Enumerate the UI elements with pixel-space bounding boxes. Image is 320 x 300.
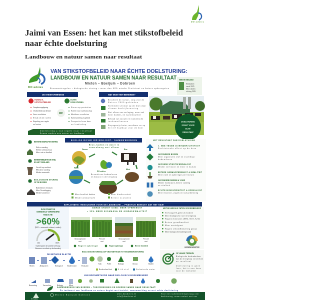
panel: resultaat van doelsturing: HET RESULTAAT VAN DOELSTURING <box>153 139 196 142</box>
poster logo <box>28 67 45 89</box>
panel: nieuw beleid: NIEUW BELEID <box>179 80 194 82</box>
field legend <box>74 238 149 248</box>
kringloop checks: Meer kwaliteit bodem <box>75 193 96 196</box>
panel: left column practices: OP DE BODEM <box>34 182 47 184</box>
panel: target: Doelsturing is geen <box>176 264 200 268</box>
panel: practice list: Hogere stikstofbenutting gewas <box>165 228 197 230</box>
panel: wat moet het bereiken: WAT MOET HET BEREIKEN? <box>108 93 136 96</box>
list: huidig beleid: Geen resultaten <box>33 113 46 116</box>
logo top right: DO advies <box>191 22 205 24</box>
icon: green check: DOELSTURING <box>70 102 84 104</box>
panel: resultaat van doelsturing: 1. NEE TEGEN 30 MINDER UITSTOOT <box>158 146 201 148</box>
kringloop diagram: Bevorderen bodemleven <box>91 173 117 176</box>
panel: target: voor de toekomst <box>176 270 197 272</box>
panel: resultaat van doelsturing: Meer organische stof en vruchtbaar <box>158 156 195 158</box>
footer <box>25 292 205 300</box>
panel: wat moet het bereiken: Niet alleen een verlaging, maar ook <box>108 111 144 114</box>
poster heading: LANDBOUW EN NATUUR SAMEN NAAR RESULTAAT <box>50 76 177 82</box>
footer: Mieten Boeijum Dobroen <box>55 294 90 297</box>
list: huidig beleid: Stapeling van regels <box>33 120 49 123</box>
panel: resultaat van doelsturing: Meer insecten, vogels en natuurbeleving <box>158 192 198 194</box>
photo: field 3 <box>115 217 133 237</box>
field legend: Perceel <box>99 238 105 240</box>
logo top right <box>191 5 205 24</box>
panel: practice list: Meer biologische bodemgezond <box>165 230 191 234</box>
panel: nieuw beleid: richting 2035 <box>186 90 196 93</box>
panel: nieuw beleid: vanaf 2025 <box>186 86 194 88</box>
panel: field comparison <box>71 206 156 248</box>
panel: wat moet het bereiken: het erf haalbaar voor de boer <box>108 126 143 129</box>
icon: green check: ECHTE <box>70 100 77 102</box>
photo: field 1 <box>71 217 90 237</box>
footer: Voor een samenwerkingsvraag over <box>161 292 199 296</box>
method steps 1: Kalk <box>98 264 102 266</box>
panel: resultaat van doelsturing: GEZONDERE BODEM <box>158 154 178 156</box>
closing text: De toekomst van landbouw en natuur begint met inzicht, samenwerking en met echte doelsturing <box>60 289 178 292</box>
panel: left column practices: BETERE BEDRIJFSVOERING <box>34 142 59 144</box>
panel: gauge: (N2O + ammoniak uitstoot, minder) <box>35 226 62 229</box>
method steps 2 <box>29 274 177 287</box>
icon: green check <box>64 98 84 104</box>
method steps 2: Verwerking <box>43 284 51 287</box>
icon: colour wheel: BODEM-MONITOR <box>185 247 200 249</box>
panel: wat moet het bereiken: Natura 2000-gebieden <box>108 101 138 104</box>
callout: green circle: ZORGT VOOR <box>182 125 195 127</box>
panel: de stikstofimpasse <box>27 92 92 126</box>
panel: target: OP LANGE TERMIJN <box>176 252 194 255</box>
panel: field comparison: + 35% MEER BIOMASSA EN GEWASKWALITEIT <box>87 210 148 213</box>
icon: red warning: UITSTOOTBELEID <box>34 102 52 104</box>
panel: practice list: Meer biologische rust in kringloop <box>165 214 196 218</box>
gauge chart <box>37 230 59 241</box>
panel: kringloop heading <box>65 138 142 149</box>
kringloop diagram: en balans in de kringloop <box>91 176 117 178</box>
method steps 2: Effect <box>69 284 74 287</box>
section bar: EXPLOITATIE: RESULTATEN VOOR DE LANDBOUW — PRAKTIJK BEWIJST DAT HET KAN! <box>64 203 164 206</box>
icon: result items <box>146 144 154 197</box>
method steps 1: Gewas <box>132 264 138 266</box>
photo: field 4 <box>136 217 156 237</box>
panel: wat moet het bereiken: Stapsgewijs beter, meetbaar en op <box>108 124 145 127</box>
field legend: Gewasopname <box>74 238 86 240</box>
field legend: met <box>145 240 148 243</box>
green banner <box>28 129 95 135</box>
method steps 1: DE METHODE IN ACTIE <box>47 253 72 256</box>
section bar <box>27 202 202 206</box>
panel: left column practices: Meer rust en kwaliteit <box>36 151 52 154</box>
method steps 1: Bodemwater <box>67 264 77 268</box>
field legend: met <box>101 240 104 243</box>
kringloop diagram: Mest <box>126 168 130 171</box>
kringloop diagram: Water <box>74 166 79 170</box>
list: doelsturing: Perspectief voor boer <box>71 120 91 123</box>
list: doelsturing <box>68 106 92 126</box>
photo: cows on pasture <box>149 96 205 140</box>
method steps 1: Verbeterde water <box>136 268 155 271</box>
panel: practice list: Meer wortelgroei <box>165 224 184 227</box>
callout: green circle: RESULTAAT <box>182 131 194 134</box>
panel: practice list <box>160 207 204 249</box>
panel: kringloop heading: BIOLOGISCHE KRINGLOOP: SAMENWERKEN <box>71 139 138 142</box>
panel: resultaat van doelsturing: GEZONDE STIKSTOFKRINGLOOP <box>158 164 192 166</box>
panel: kringloop heading: samenhang met elkaar <box>89 146 119 149</box>
poster heading <box>50 67 188 90</box>
panel: gauge: >60% <box>55 242 60 244</box>
panel: wat moet het bereiken <box>99 92 148 129</box>
kringloop diagram: Koe <box>124 149 127 151</box>
panel: wat moet het bereiken: slimme bedrijfsvoering <box>108 107 138 110</box>
panel: target: Biologische bodembeheer <box>176 255 201 258</box>
panel: resultaat van doelsturing: Minder verliezen en meer in balans <box>158 166 196 168</box>
panel: target: kan de kringloop versterken <box>176 258 203 260</box>
kringloop checks: Betere economie <box>111 196 131 199</box>
panel: left column practices: BEHEERSBAAR IN DE STAL <box>34 158 57 162</box>
method steps 1 <box>29 250 155 271</box>
panel: left column practices: Meer N-vastlegging <box>36 189 51 192</box>
callout: green circle: DOELSTURING <box>181 122 195 124</box>
kringloop diagram <box>69 149 139 194</box>
method steps 1: Biologisch <box>55 266 63 268</box>
panel: de stikstofimpasse: DE STIKSTOFIMPASSE <box>42 93 65 96</box>
poster logo: DO advies <box>28 85 43 89</box>
field legend: Betere kwaliteit <box>135 245 148 248</box>
panel: resultaat van doelsturing: Meer eiwit en opbrengst per hectare <box>158 174 194 176</box>
list: doelsturing: Samenwerking in gebied <box>71 116 90 120</box>
method steps 2: VAN BRONMETHODE NAAR BIOLOGISCH BODEMBEHEER <box>84 274 149 277</box>
panel: left column practices: Minder ammoniak <box>36 171 50 174</box>
panel: gauge <box>28 207 69 250</box>
field legend: Hogere opbrengst <box>109 245 123 248</box>
panel: resultaat van doelsturing: Minder medicijnen, betere voeding <box>158 182 190 184</box>
kringloop checks: Minder uitstoot lucht <box>75 196 96 199</box>
list: doelsturing: Meetbare resultaten <box>71 113 89 116</box>
icon: green leaf <box>47 286 53 291</box>
list: huidig beleid: Strijd om de ruimte <box>33 116 51 120</box>
panel: kringloop heading: Bron, bodem en water in <box>89 144 119 146</box>
panel: practice list: Betere grondkwaliteit <box>165 221 190 224</box>
panel: resultaat van doelsturing: bodemleven <box>158 159 172 161</box>
panel: left column practices: Slimme uitstoot-maat <box>36 148 52 152</box>
panel: gauge: 100 <box>37 242 40 244</box>
panel: target: en resultaat <box>176 260 192 263</box>
green banner: Doelsturing = van regels naar resultaat <box>40 130 93 133</box>
method steps 1: Evaluatie <box>82 264 89 268</box>
panel: resultaat van doelsturing <box>146 139 206 201</box>
panel: target: luxe, het is een kans <box>176 267 201 270</box>
method steps 1: Bodem <box>148 264 154 266</box>
footer: www.doadvies.nl <box>117 294 137 296</box>
list: huidig beleid: Complexe regelgeving <box>33 106 48 109</box>
panel: target <box>160 250 204 274</box>
panel: left column practices: Bodemleven in balans <box>36 188 53 190</box>
kringloop diagram: Gewas <box>82 149 88 151</box>
field legend: Perceel <box>143 238 149 240</box>
panel: practice list: Hogere mineralen (NH4, NO3, K2O) <box>165 218 200 220</box>
panel: practice list: Verhoogd N-gebruik bodem <box>165 212 194 214</box>
footer: info@doadvies.nl <box>117 296 137 298</box>
panel: left column practices: BIOLOGISCHE STURING <box>34 180 59 182</box>
field legend: met <box>123 240 126 243</box>
panel: left column practices: EN HET WEILAND <box>34 161 50 164</box>
poster heading: Bronmaatregelen • biologische sturing • meer dan 60% minder N-uitstoot en betere opbrengsten <box>50 87 169 90</box>
method steps 1: Biologie <box>118 264 124 266</box>
panel: resultaat van doelsturing: ECHTE BIODIVERSITEIT & KRINGLOOP <box>158 190 203 192</box>
icon: OF circle: OF <box>59 111 63 115</box>
article title: Jaimi van Essen: het kan met stikstofbeleid <box>25 28 184 38</box>
panel: resultaat van doelsturing: GEZONDERE DIEREN & VOER <box>158 180 186 182</box>
panel: wat moet het bereiken: Behoud van sociale en economische <box>108 118 143 120</box>
method steps 1: Analyseren <box>40 264 48 268</box>
callout: green circle <box>175 114 201 140</box>
method steps 1: BIOLOGISCHE KRINGLOOP VAN METHODE TOT BODEMMONITORING <box>82 250 145 254</box>
article title: naar échte doelsturing <box>25 39 107 48</box>
list: doelsturing: Sturen op prestaties <box>71 106 91 109</box>
panel: nieuw beleid: Meer doelen <box>186 88 195 90</box>
panel: left column practices: Stal en voeding <box>36 146 48 149</box>
icon: red warning: HUIDIG N- <box>34 100 44 102</box>
method steps 2: Bemesting <box>29 284 37 287</box>
panel: resultaat van doelsturing: Rechtstreeks effect op de bron <box>158 147 196 150</box>
kringloop diagram: DO advies <box>97 171 106 173</box>
panel: gauge: Bewezen resultaat op de boerderij <box>35 247 61 250</box>
panel: wat moet het bereiken: Bescherm de natuur, zorg voor de <box>108 98 144 102</box>
closing text: SAMENWERKEN VAN BOEREN – THEORIEKENNIS EN BOEREN SAMEN NAAR RESULTAAT! <box>57 286 156 289</box>
list: huidig beleid <box>30 106 51 126</box>
panel: gauge: GEMIDDELD VERMINDERD <box>36 212 60 214</box>
panel: field comparison: GEWAS GROEIT GOED: MEER OPBRENGST <box>92 206 143 210</box>
field legend: Gewasopname <box>118 238 130 240</box>
panel: left column practices <box>27 140 59 195</box>
panel: wat moet het bereiken: toekomstkansen <box>108 120 128 123</box>
panel: left column practices: Minder kunstmest <box>36 192 50 194</box>
list: huidig beleid: Onzekerheid voor de boer <box>33 110 51 112</box>
list: huidig beleid: en kosten <box>33 123 41 126</box>
poster heading: VAN STIKSTOFBELEID NAAR ÉCHTE DOELSTURING: <box>50 67 188 75</box>
panel: left column practices: Gericht op resultaat <box>36 166 51 169</box>
kringloop checks: Meer biodiversiteit <box>111 193 132 196</box>
panel: gauge: Opbrengsten & kwaliteit omhoog <box>36 244 60 248</box>
panel: resultaat van doelsturing: en vitaliteit <box>158 184 171 187</box>
method steps 1: Meten <box>30 264 34 268</box>
article title <box>25 28 184 48</box>
panel: left column practices: Effectieve voeding <box>36 168 50 172</box>
panel: wat moet het bereiken: meer bodem- en waterkwaliteit <box>108 113 142 116</box>
panel: nieuw beleid: Stikstofwet <box>186 82 195 86</box>
photo: field 2 <box>92 217 112 237</box>
panel: resultaat van doelsturing: BETERE GEWASOPBRENGST & KWALITEIT <box>158 171 203 174</box>
kringloop checks <box>72 193 132 199</box>
footer: doelsturing, neem contact met ons <box>161 295 197 298</box>
poster heading: Mieten – Boeijum – Dobroen <box>85 82 135 86</box>
method steps 2: Biologie <box>57 285 63 287</box>
panel: nieuw beleid <box>177 77 202 95</box>
method steps 1: Stikstof <box>118 268 130 271</box>
panel: gauge: REDUCTIE <box>43 214 53 216</box>
green banner: Samen werken aan natuur en landbouw <box>40 132 85 135</box>
panel: gauge: IN DE PRAKTIJK <box>41 208 56 211</box>
list: doelsturing: en landschap <box>71 124 86 126</box>
big number: >60% <box>36 216 60 226</box>
article subtitle: Landbouw en natuur samen naar resultaat <box>25 54 142 60</box>
panel: wat moet het bereiken: Verminder uitstoot op de bron door <box>108 104 146 108</box>
panel: practice list: METINGSRESULTATEN BODEMBEHEER <box>163 207 202 210</box>
closing text <box>57 286 178 292</box>
method steps 1: Pellet <box>107 262 112 266</box>
callout: green circle: ECHT <box>185 128 191 130</box>
field legend: met <box>79 240 82 243</box>
list: doelsturing: Ruimte voor vakmanschap <box>71 110 92 112</box>
icon: red warning <box>28 98 52 104</box>
field legend: Hogere opbrengst <box>78 245 98 248</box>
method steps 1: Bodemkwaliteit <box>99 268 113 271</box>
